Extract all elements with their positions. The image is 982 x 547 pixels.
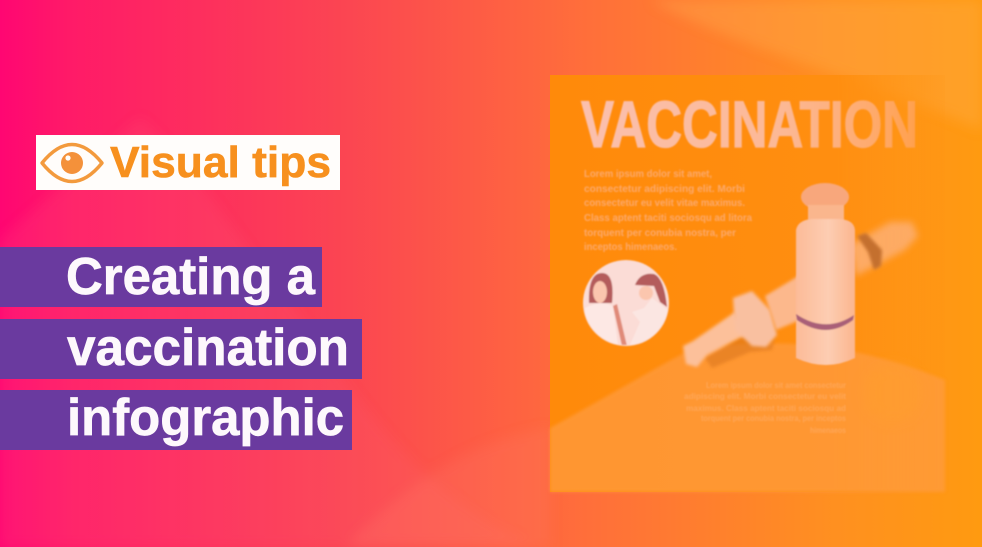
poster intro text: Lorem ipsum dolor sit amet, [584,169,712,180]
nurse body [632,299,667,344]
syringe shadow [705,325,778,368]
poster intro text: torquent per conubia nostra, per [584,228,736,239]
vial cap [801,183,849,211]
poster intro text [584,169,752,253]
patient hair [589,273,613,303]
label background [36,135,340,190]
illustration: vial [796,183,855,365]
patient face [593,281,607,303]
poster caption text: adipiscing elit. Morbi consectetur eu velit [684,392,846,401]
patient body [585,303,618,346]
cotton swab arm [613,304,627,346]
heading line: infographic: infographic [67,389,344,447]
vial band [796,314,854,330]
circular photo of patient and nurse [583,260,669,346]
poster intro text: consectetur adipiscing elit. Morbi [584,184,745,195]
panel: faded vaccination poster [550,75,945,492]
vial body [796,219,855,365]
icon: eye [42,144,102,182]
poster intro text: consectetur eu velit vitae maximus. [584,198,745,209]
poster caption text: maximus. Class aptent taciti sociosqu ad [686,404,846,413]
syringe right end [850,222,918,276]
poster caption text [684,381,846,435]
poster caption text: torquent per conubia nostra, per inceptos [701,414,846,423]
syringe barrel left [765,275,800,330]
circle backdrop [583,260,669,346]
nurse face [639,286,653,300]
label text: Visual tips [110,138,331,187]
poster caption text: himenaeos [810,426,846,435]
nurse hair [635,274,667,307]
syringe plunger end [683,312,745,367]
poster intro text: Class aptent taciti sociosqu ad litora [584,213,752,224]
poster caption text: Lorem ipsum dolor sit amet consectetur [706,381,846,390]
illustration: syringe [683,222,918,368]
poster intro text: inceptos himenaeos. [584,242,677,253]
syringe flange [733,291,777,347]
faint badge icon [863,363,923,423]
vial neck [808,205,844,225]
heading line: Creating a: Creating a [66,248,316,306]
heading line: vaccination: vaccination [67,319,349,377]
syringe dark ring [857,233,882,270]
label: Visual tips [36,135,340,190]
poster lower wave [550,343,945,492]
poster background [550,75,945,492]
